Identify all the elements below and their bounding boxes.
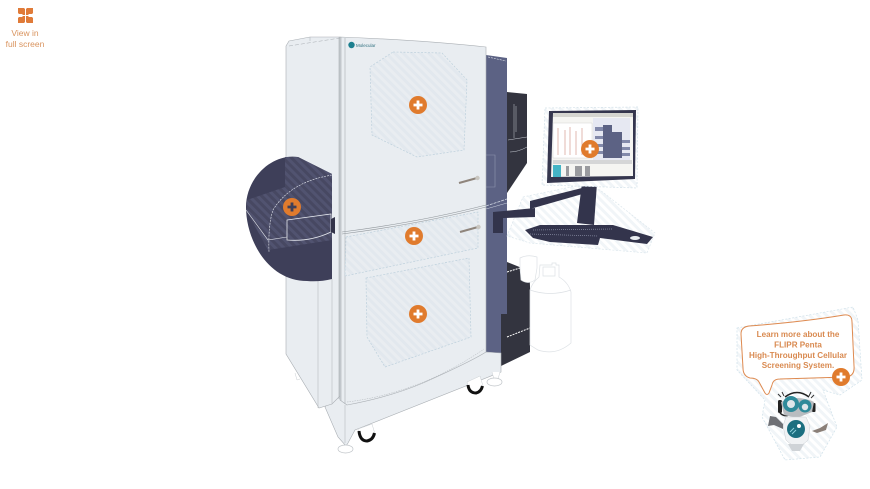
blue side panel xyxy=(486,55,507,358)
logo xyxy=(348,42,355,48)
hotspot: upper reader region xyxy=(370,52,467,157)
speech bubble xyxy=(741,315,854,394)
top lid xyxy=(289,37,340,46)
callout text: High-Throughput Cellular xyxy=(749,351,848,360)
marker: middle door xyxy=(405,227,423,245)
marker: side module xyxy=(283,198,301,216)
hotspot: middle door region xyxy=(345,212,478,276)
marker: monitor xyxy=(581,140,599,158)
hotspot: lower drawer region xyxy=(366,258,471,367)
black rear unit xyxy=(501,92,530,366)
casters and feet xyxy=(295,372,502,453)
lower arm xyxy=(493,208,535,233)
front panel xyxy=(340,37,486,405)
icon: view in full screen xyxy=(18,8,33,23)
robot mascot xyxy=(768,392,828,451)
side panel xyxy=(286,37,340,408)
upper arm xyxy=(530,187,586,209)
keyboard xyxy=(525,225,653,245)
instrument cabinet: Molecular xyxy=(356,43,376,48)
hotspot markers xyxy=(283,96,599,323)
base xyxy=(325,352,501,446)
dark side module xyxy=(246,157,335,281)
mouse xyxy=(630,236,640,240)
callout text: FLIPR Penta xyxy=(774,340,822,349)
callout text: Learn more about the xyxy=(757,330,840,339)
marker: lower drawer xyxy=(409,305,427,323)
monitor arm and keyboard xyxy=(493,183,655,253)
gas bottles xyxy=(520,256,571,352)
hatched callout backdrop xyxy=(737,307,862,460)
marker: learn more xyxy=(832,368,850,386)
door handles xyxy=(459,178,477,183)
instrument cabinet xyxy=(286,37,507,446)
callout text: Screening System. xyxy=(762,361,834,370)
label: view in full screen: full screen xyxy=(6,39,45,49)
monitor with screen xyxy=(542,107,638,188)
marker: upper reader xyxy=(409,96,427,114)
label: view in full screen: View in xyxy=(11,28,39,38)
stand xyxy=(577,183,597,225)
